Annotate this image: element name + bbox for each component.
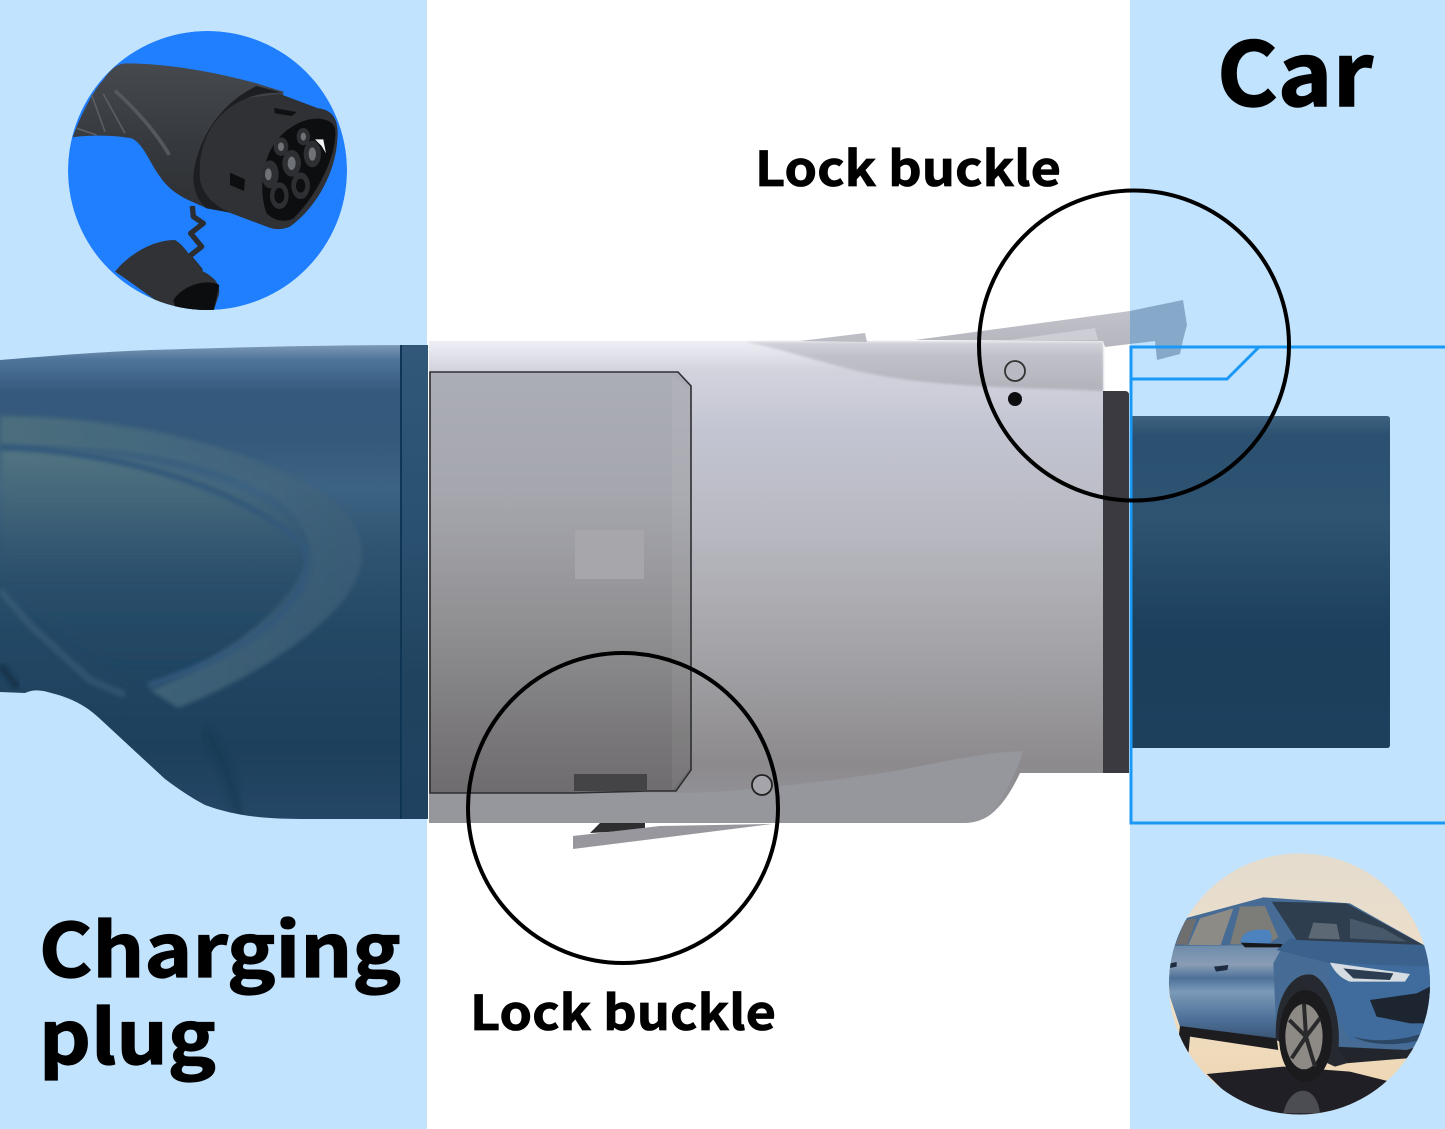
right panel background (1130, 0, 1445, 1129)
front fascia (1414, 966, 1430, 1046)
label: lower lock buckle: Lock buckle (470, 974, 776, 1044)
lower lock buckle latch (573, 823, 772, 849)
side windows (1188, 908, 1233, 945)
left panel background (0, 0, 427, 1129)
highlight circle: upper lock buckle (979, 190, 1289, 500)
dark seal ring (1103, 391, 1129, 773)
dark tab (574, 774, 647, 791)
front grille (1370, 987, 1433, 1023)
car socket block (1131, 416, 1390, 748)
photo circle: blue car (1163, 853, 1437, 1117)
heading: Car: Car (1217, 5, 1374, 132)
floor reflection (1207, 1067, 1390, 1117)
upper pivot pin (1005, 361, 1025, 381)
hood (1277, 938, 1433, 967)
heading: Charging plug: Charging (39, 892, 401, 999)
connector pins (261, 128, 321, 209)
window panel (430, 372, 691, 793)
car body (1167, 897, 1433, 1062)
connector cap (115, 240, 219, 312)
side panel (1168, 945, 1283, 1040)
lower pivot pin (752, 775, 772, 795)
coiled tether (189, 206, 203, 278)
panel square (575, 530, 644, 579)
connector face (262, 119, 335, 221)
wheel arch (1276, 974, 1347, 1067)
upper black dot (1008, 392, 1022, 406)
silver adapter body (429, 341, 1103, 823)
heading: Charging plug: plug (39, 979, 216, 1086)
heading: Charging plug (39, 892, 401, 1086)
headlight (1330, 963, 1410, 982)
label: upper lock buckle: Lock buckle (755, 130, 1061, 200)
lower sill (1178, 1026, 1278, 1055)
windshield (1272, 902, 1423, 945)
highlight circle: lower lock buckle (468, 653, 778, 963)
charging plug handle (0, 345, 428, 820)
wheel (1279, 990, 1332, 1070)
top bracket band (745, 342, 1103, 391)
car socket outline (1131, 347, 1445, 823)
door handle (1214, 965, 1228, 972)
connector nose (198, 94, 338, 229)
mirror (1241, 930, 1283, 947)
photo circle: charging connector (68, 31, 347, 312)
connector handle (73, 63, 283, 212)
bottom fin (429, 751, 1023, 823)
upper lock buckle latch (800, 300, 1187, 360)
